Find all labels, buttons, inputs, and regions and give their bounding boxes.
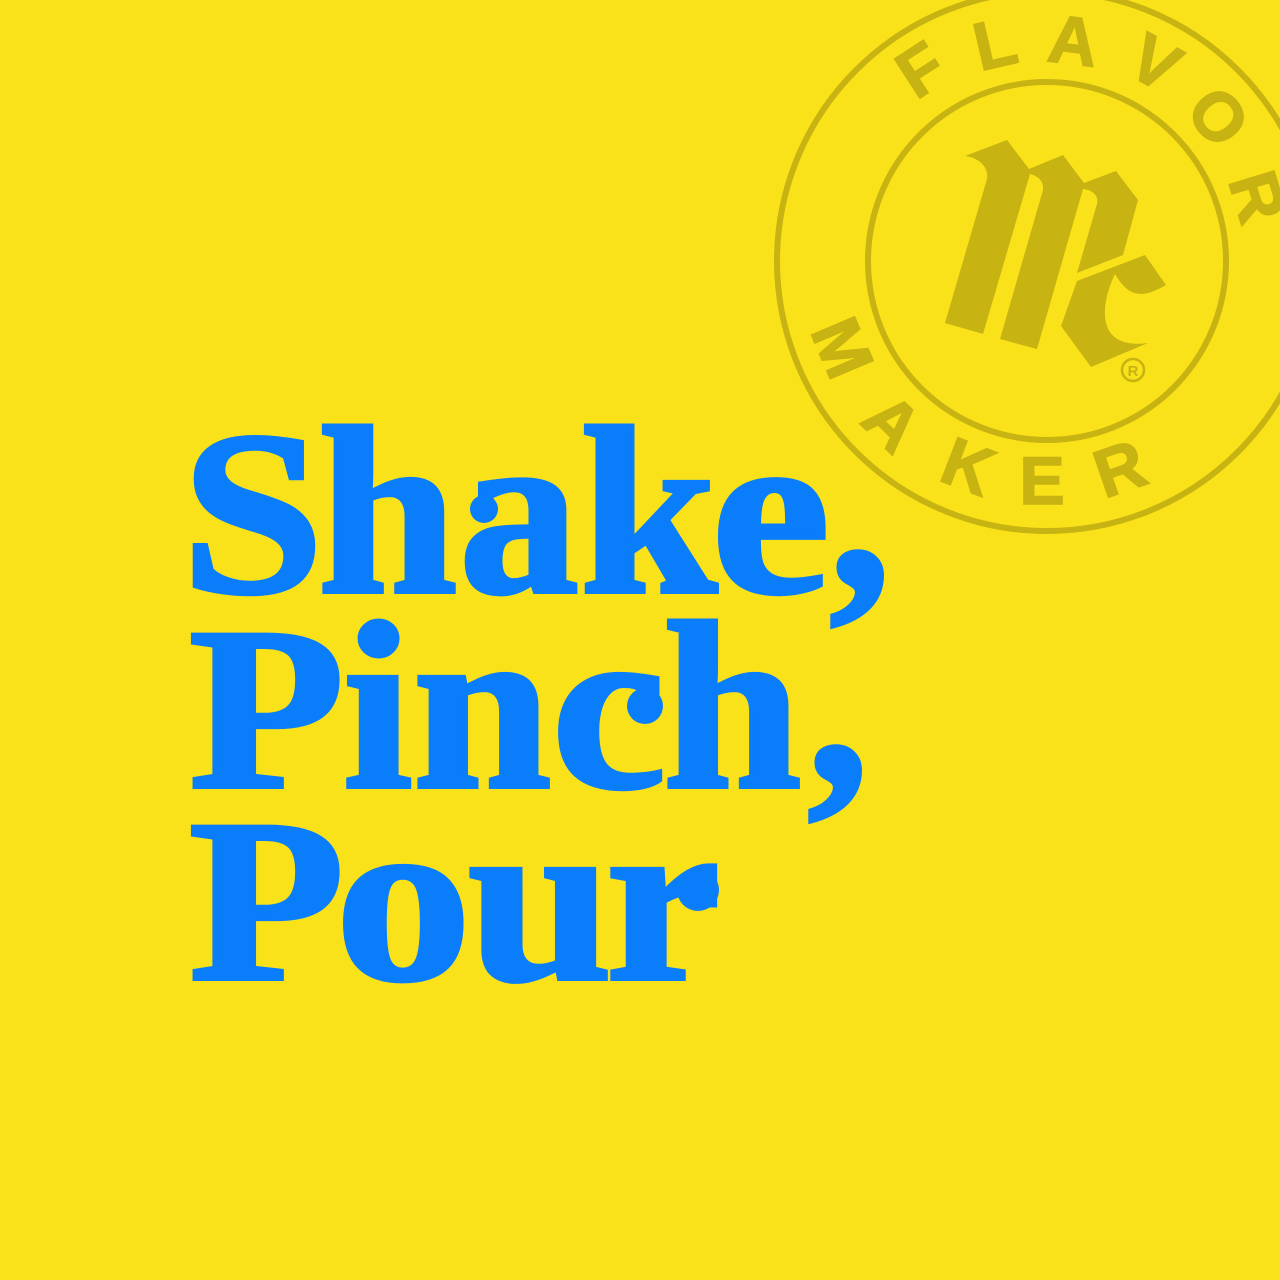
badge text: FLAVOR: F: [883, 27, 959, 113]
outer ring: [777, 0, 1280, 531]
title line 3: Pour: r: [606, 766, 721, 1032]
badge text: FLAVOR: V: [1117, 19, 1193, 107]
title line 2: Pinch,: h: [663, 573, 802, 839]
title line 1: Shake,: e: [711, 379, 830, 645]
title line 1: Shake,: a: [459, 378, 579, 644]
badge text: MAKER: [796, 307, 1156, 519]
title: Shake, Pinch, Pour: [181, 366, 891, 1032]
title line 2: Pinch,: c: [551, 574, 666, 840]
title line 1: Shake,: S: [181, 384, 324, 643]
title line 1: Shake,: ,: [829, 366, 892, 643]
title line 3: Pour: [189, 765, 721, 1032]
title line 3: Pour: u: [468, 766, 613, 1032]
title line 2: Pinch,: i: [343, 574, 413, 840]
badge text: FLAVOR: O: [1172, 72, 1264, 162]
icon: registered mark: [1122, 359, 1144, 381]
title line 2: Pinch,: ,: [807, 561, 870, 838]
badge text: MAKER: R: [1084, 425, 1156, 513]
title line 1: Shake,: [181, 366, 891, 645]
title line 2: Pinch,: [189, 561, 869, 840]
icon: registered mark: R: [1128, 363, 1139, 380]
inner ring: [868, 82, 1226, 440]
badge: Flavor Maker seal: [777, 0, 1280, 531]
title line 2: Pinch,: n: [413, 573, 552, 839]
badge text: MAKER: A: [848, 379, 936, 467]
title line 1: Shake,: k: [580, 378, 718, 644]
icon: Mc monogram logo mark: [945, 140, 1166, 367]
badge text: FLAVOR: A: [1044, 0, 1102, 82]
title line 3: Pour: P: [189, 771, 345, 1029]
badge text: FLAVOR: L: [966, 2, 1024, 86]
title line 3: Pour: o: [335, 765, 472, 1031]
badge text: MAKER: E: [1019, 443, 1065, 519]
badge text: FLAVOR: [883, 0, 1280, 232]
title line 1: Shake,: h: [318, 379, 457, 645]
title line 2: Pinch,: P: [189, 579, 345, 837]
badge text: MAKER: M: [796, 307, 888, 389]
badge text: MAKER: K: [931, 423, 1005, 511]
